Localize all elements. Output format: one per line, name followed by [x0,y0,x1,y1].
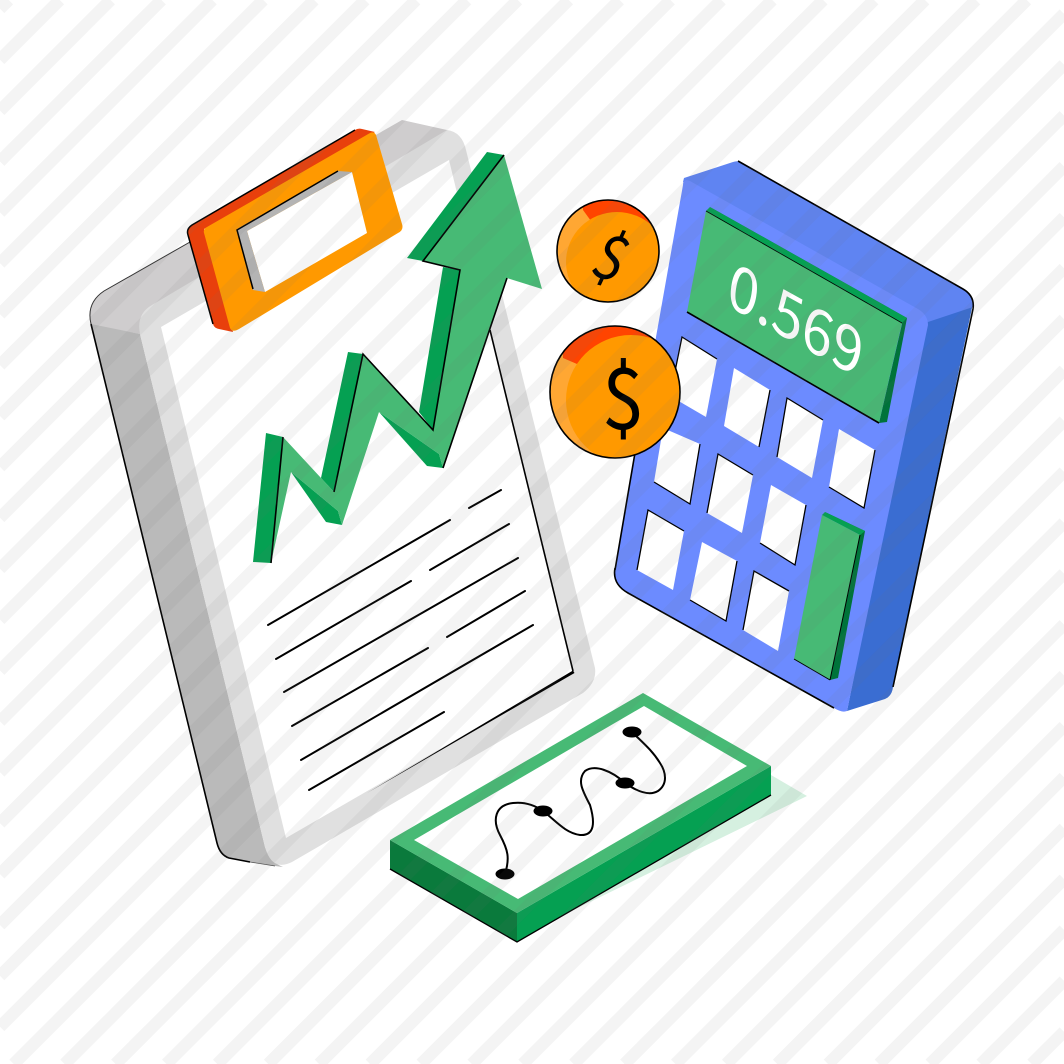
calculator side face [847,303,973,711]
banknote edge outline [390,795,771,942]
calculator front face [615,180,928,712]
banknote route dots [496,726,642,880]
calculator [615,161,973,712]
banknote right side [517,766,771,942]
clip red side [188,129,375,332]
calculator equals key [794,512,865,680]
small coin dollar sign: $ [579,209,647,299]
text lines on paper [268,490,533,790]
coin: small [556,199,660,303]
clipboard clip [188,129,402,332]
calculator display [687,207,907,423]
clip hole background [237,172,367,292]
banknote left side [390,840,517,942]
banknote route curve [496,732,665,874]
calculator outlines [615,161,973,708]
arrow light face [271,155,542,563]
clip outlines [188,130,355,324]
arrow dark faces [253,152,504,563]
clipboard side face [91,324,283,867]
calculator keys [637,337,875,651]
banknote white centre [414,706,747,899]
banknote [390,693,807,942]
clipboard [90,120,595,867]
clipboard outlines [90,242,575,866]
clip hole shading [237,171,352,292]
clipboard front frame [139,130,595,865]
calculator top face [683,161,973,322]
large coin dollar sign: $ [602,331,644,454]
clip orange front [204,132,402,331]
growth arrow [253,152,542,563]
calculator key outlines [637,337,875,630]
clipboard top face [90,120,465,334]
banknote shadow [547,775,807,923]
calculator readout: 0.569 [722,234,871,395]
banknote top face [390,693,771,913]
coin: large [549,325,681,459]
clipboard paper [161,160,573,838]
arrow outlines [271,155,507,563]
